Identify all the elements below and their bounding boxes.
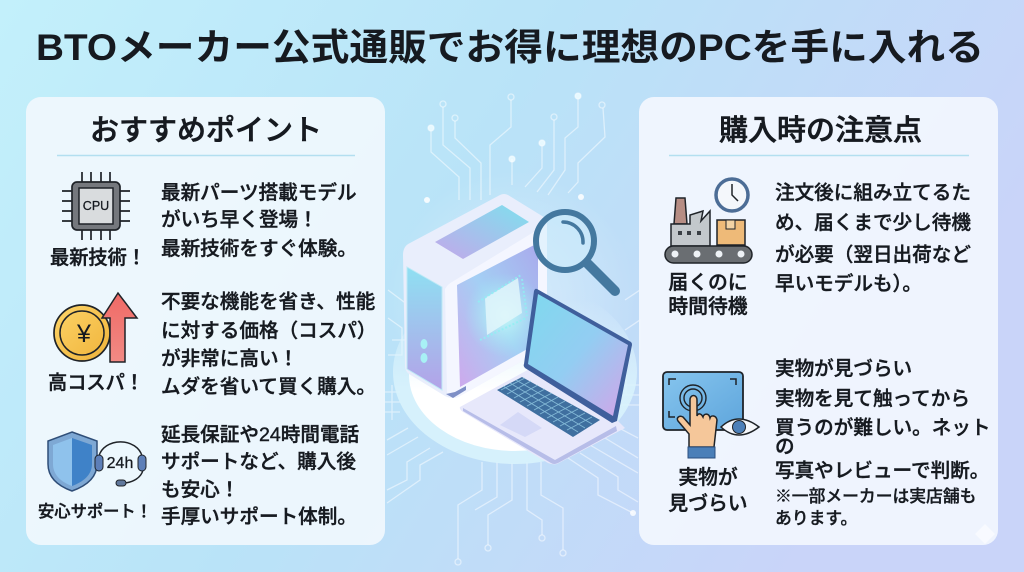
platform bbox=[387, 170, 637, 464]
title: BTOメーカー公式通販でお得に理想のPCを手に入れる bbox=[36, 27, 984, 68]
text: 届くまでの説明: 注文後に組み立てるた bbox=[775, 182, 971, 204]
icon: CPU: CPU bbox=[83, 199, 109, 213]
heading: おすすめポイント: おすすめポイント bbox=[90, 114, 322, 147]
text: 届くまでの説明: め、届くまで少し待機 bbox=[775, 212, 971, 234]
item: 高コスパ bbox=[48, 291, 377, 398]
label: 届くのに時間待機: 時間待機 bbox=[668, 296, 748, 318]
note: 実店舗: あります。 bbox=[775, 509, 857, 528]
icon: shield and headset: 24h bbox=[107, 455, 133, 472]
text: 最新技術 description: 最新技術をすぐ体験。 bbox=[161, 238, 357, 260]
icon: yen coin and arrow bbox=[54, 293, 137, 362]
label: 安心サポート！: 安心サポート！ bbox=[38, 503, 152, 521]
item: 届くのに時間待機 bbox=[665, 179, 971, 318]
label: 最新技術！: 最新技術！ bbox=[50, 247, 146, 269]
text: 安心サポート description: も安心！ bbox=[161, 479, 239, 501]
icon: yen coin and arrow: ¥ bbox=[76, 320, 91, 348]
panel: おすすめポイント bbox=[26, 97, 385, 545]
sparkle: corner bbox=[975, 524, 995, 544]
item: 安心サポート bbox=[38, 424, 359, 528]
icon: CPU bbox=[62, 172, 130, 240]
item: 実物が見づらい bbox=[663, 358, 991, 528]
text: 最新技術 description: がいち早く登場！ bbox=[161, 209, 318, 231]
item: 最新技術 bbox=[50, 172, 357, 269]
text: 実物の説明: 実物が見づらい bbox=[775, 358, 912, 380]
text: 実物の説明: 実物を見て触ってから bbox=[775, 388, 970, 410]
panel: 購入時の注意点 bbox=[639, 97, 998, 545]
sparkles bbox=[424, 197, 430, 203]
central illustration bbox=[387, 170, 637, 516]
text: 高コスパ description: に対する価格（コスパ） bbox=[161, 320, 377, 342]
icon: shield and headset bbox=[48, 432, 146, 491]
text: 実物の説明: 写真やレビューで判断。 bbox=[775, 460, 989, 482]
heading: 購入時の注意点: 購入時の注意点 bbox=[719, 114, 922, 147]
icon: touch screen and eye bbox=[663, 372, 759, 458]
note: 実店舗: ※一部メーカーは実店舗も bbox=[775, 487, 976, 506]
text: 安心サポート description: サポートなど、購入後 bbox=[161, 451, 356, 473]
text: 実物の説明: の bbox=[775, 436, 795, 458]
label: 実物が見づらい: 実物が bbox=[678, 467, 738, 489]
text: 届くまでの説明: が必要（翌日出荷など bbox=[775, 244, 971, 266]
PC tower bbox=[403, 194, 547, 398]
label: 高コスパ！: 高コスパ！ bbox=[48, 372, 144, 394]
text: 高コスパ description: が非常に高い！ bbox=[161, 348, 298, 370]
text: 実物の説明: 買うのが難しい。ネット bbox=[775, 417, 991, 439]
text: 安心サポート description: 延長保証や24時間電話 bbox=[161, 424, 359, 446]
laptop bbox=[460, 289, 632, 464]
magnifying glass bbox=[536, 212, 615, 291]
text: 最新技術 description: 最新パーツ搭載モデル bbox=[161, 181, 357, 204]
text: 届くまでの説明: 早いモデルも）。 bbox=[775, 272, 922, 295]
text: 安心サポート description: 手厚いサポート体制。 bbox=[161, 506, 357, 528]
text: 高コスパ description: 不要な機能を省き、性能 bbox=[161, 291, 376, 313]
circuit lines background bbox=[385, 93, 640, 565]
text: 高コスパ description: ムダを省いて買く購入。 bbox=[161, 376, 376, 398]
icon: factory, clock and conveyor bbox=[665, 179, 752, 263]
label: 実物が見づらい: 見づらい bbox=[668, 493, 748, 515]
label: 届くのに時間待機: 届くのに bbox=[668, 272, 748, 294]
